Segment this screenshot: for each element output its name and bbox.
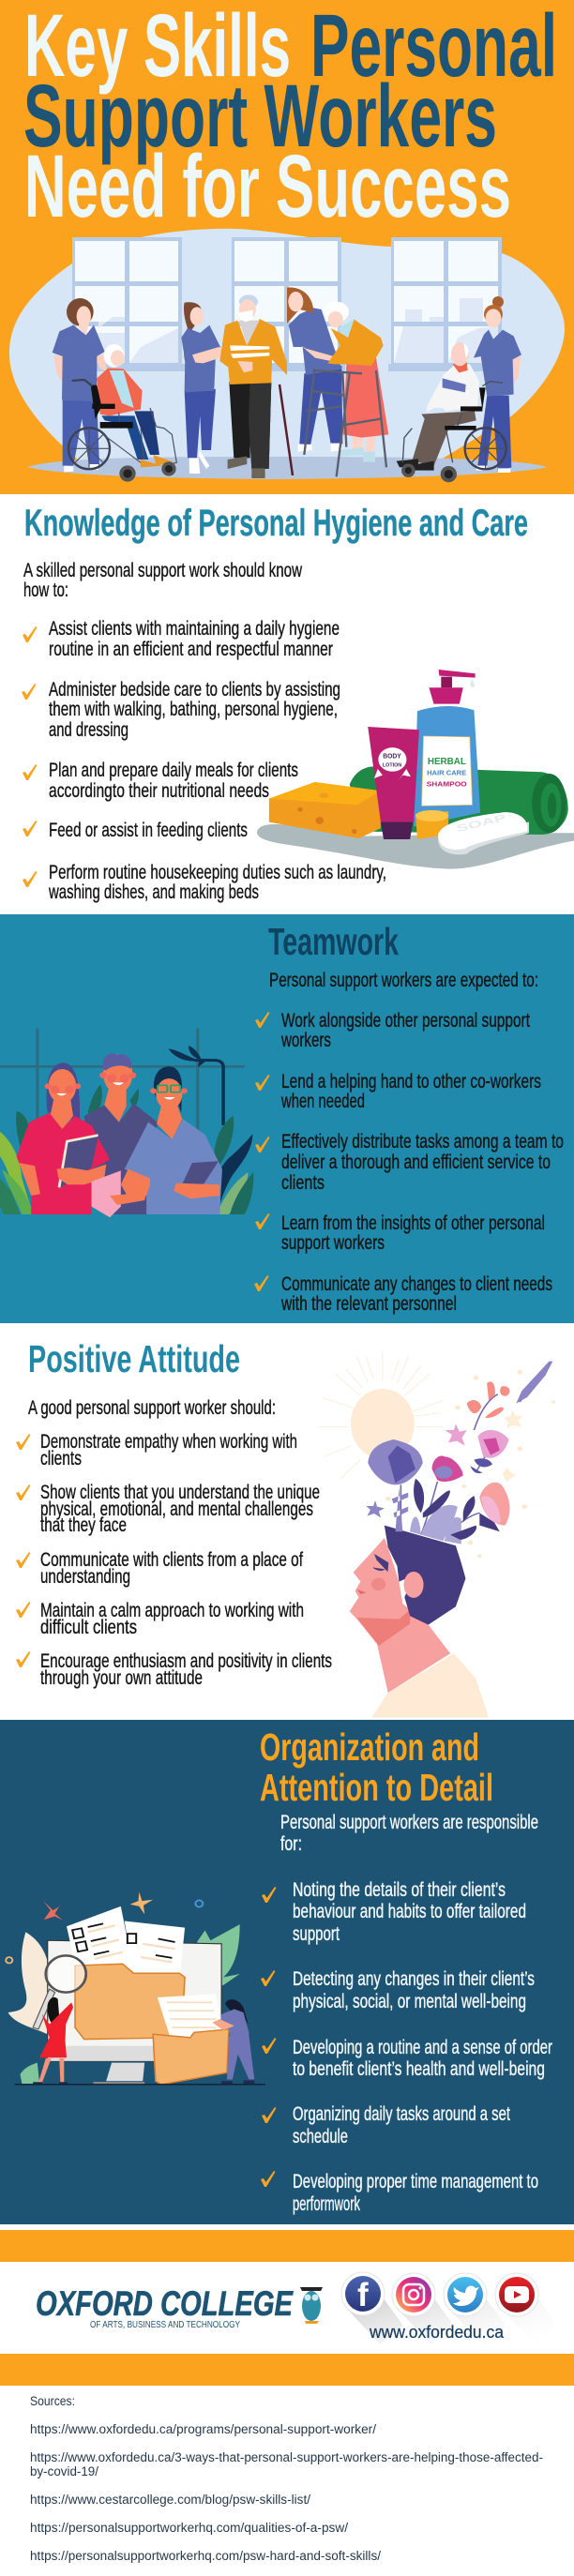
checklist: Encourage enthusiasm and positivity in clients: [40, 1650, 332, 1672]
heading: Teamwork: [268, 920, 399, 963]
panel: teamwork: [0, 914, 574, 1323]
checklist: difficult clients: [40, 1617, 137, 1638]
intro text: for:: [280, 1833, 302, 1855]
website: www.oxfordedu.ca: [369, 2323, 505, 2342]
illustration: hygiene products: HAIR CARE: [427, 768, 467, 776]
checklist: [16, 1431, 332, 1689]
illustration: man with flowers growing from head: [319, 1352, 555, 1718]
panel: header: [0, 0, 574, 494]
sources: https://personalsupportworkerhq.com/qualities-of-a-psw/: [30, 2521, 348, 2535]
nurses and residents left: [53, 294, 287, 482]
checklist: physical, emotional, and mental challenges: [40, 1499, 313, 1520]
social icons: [341, 2272, 558, 2344]
illustration: healthcare team: [0, 1029, 253, 1217]
sources: by-covid-19/: [30, 2464, 98, 2478]
title: [23, 0, 557, 236]
checklist: through your own attitude: [40, 1667, 203, 1689]
checklist: support: [293, 1923, 340, 1945]
checklist: Communicate with clients from a place of: [40, 1549, 303, 1571]
intro text: A good personal support worker should:: [28, 1397, 276, 1419]
checklist: Plan and prepare daily meals for clients: [49, 760, 298, 781]
nurses and residents right: [287, 288, 521, 482]
sources: [30, 2394, 543, 2563]
checklist: Noting the details of their client’s: [293, 1879, 506, 1901]
panel: organization and attention to detail: [0, 1720, 574, 2224]
checklist: clients: [281, 1172, 325, 1194]
intro text: [280, 1812, 538, 1855]
social icons: f: [357, 2277, 369, 2313]
panel: knowledge of personal hygiene and care: [22, 503, 574, 903]
checklist: Demonstrate empathy when working with: [40, 1431, 297, 1453]
illustration: hygiene products: SOAP: [455, 812, 507, 835]
checklist: accordingto their nutritional needs: [49, 780, 269, 802]
checklist: [254, 1010, 564, 1315]
floor: [27, 457, 547, 479]
icon: owl: [300, 2287, 323, 2324]
checklist: with the relevant personnel: [280, 1293, 457, 1315]
illustration: care home scene: [9, 229, 565, 482]
sources: https://www.oxfordedu.ca/3-ways-that-personal-support-workers-are-helping-those-affected-: [30, 2450, 543, 2464]
illustration: hygiene products: [257, 670, 574, 869]
checklist: workers: [280, 1030, 331, 1051]
checklist: Administer bedside care to clients by assisting: [49, 679, 340, 700]
heading: [260, 1725, 493, 1809]
checklist: that they face: [40, 1514, 127, 1536]
sources: https://www.oxfordedu.ca/programs/personal-support-worker/: [30, 2422, 376, 2436]
checklist: schedule: [293, 2126, 348, 2147]
checklist: Feed or assist in feeding clients: [49, 820, 248, 841]
checklist: Show clients that you understand the unique: [40, 1482, 320, 1503]
checklist: [261, 1879, 552, 2215]
cane: [279, 384, 293, 475]
checklist: when needed: [280, 1091, 365, 1112]
checklist: Maintain a calm approach to working with: [40, 1600, 304, 1621]
illustration: hygiene products: SHAMPOO: [427, 779, 467, 788]
sources: https://personalsupportworkerhq.com/psw-hard-and-soft-skills/: [30, 2549, 381, 2563]
intro text: how to:: [23, 580, 68, 601]
illustration: documents, folders and monitor: [6, 1891, 265, 2085]
intro text: [23, 560, 303, 601]
heading: Positive Attitude: [28, 1337, 240, 1380]
checklist: Perform routine housekeeping duties such as laundry,: [49, 862, 386, 883]
intro text: A skilled personal support work should know: [23, 560, 303, 581]
checklist: them with walking, bathing, personal hygiene,: [49, 699, 338, 720]
illustration: hygiene products: HERBAL: [428, 757, 466, 767]
checklist: Assist clients with maintaining a daily hygiene: [49, 618, 340, 640]
checklist: washing dishes, and making beds: [48, 881, 259, 903]
checklist: [22, 618, 386, 903]
logo: OF ARTS, BUSINESS AND TECHNOLOGY: [90, 2320, 240, 2330]
illustration: hygiene products: LOTION: [383, 762, 402, 768]
panel: footer branding: [0, 2230, 574, 2386]
checklist: understanding: [40, 1566, 130, 1588]
checklist: performwork: [293, 2193, 360, 2215]
sources: https://www.cestarcollege.com/blog/psw-skills-list/: [30, 2493, 310, 2507]
checklist: clients: [40, 1448, 82, 1469]
checklist: support workers: [281, 1232, 385, 1254]
heading: Organization and: [260, 1725, 479, 1769]
logo: OXFORD COLLEGE: [36, 2284, 294, 2323]
panel: positive attitude: [16, 1337, 555, 1718]
illustration: hygiene products: BODY: [383, 751, 401, 760]
checklist: and dressing: [49, 719, 128, 741]
sources: Sources:: [30, 2394, 75, 2408]
checklist: routine in an efficient and respectful manner: [49, 639, 333, 660]
